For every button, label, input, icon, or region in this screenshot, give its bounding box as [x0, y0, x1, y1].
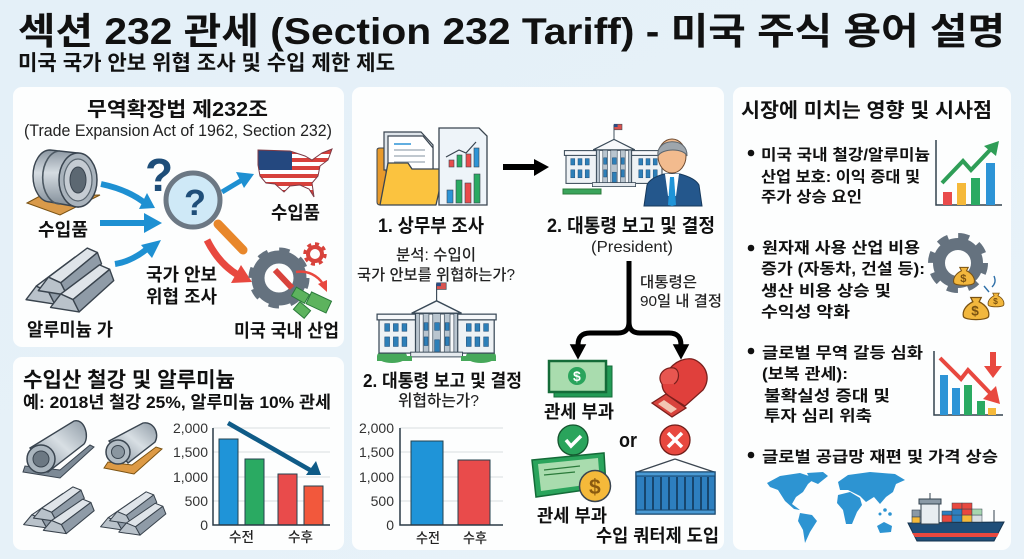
- label: 수입품: 수입품: [38, 220, 88, 240]
- bullet 2 text: 증가 (자동차, 건설 등):: [761, 260, 925, 278]
- bullet 1 text: 미국 국내 철강/알루미늄: [761, 146, 930, 164]
- icon: magnifying glass: [166, 173, 243, 250]
- bullet 2 text: [748, 239, 925, 321]
- label: 국가 안보 위협 조사: 위협 조사: [146, 287, 217, 307]
- label: step 1: 1. 상무부 조사: [378, 215, 484, 237]
- text: step 2 repeat: 위협하는가?: [398, 392, 479, 410]
- panel: imported steel and aluminium: [13, 357, 344, 550]
- icon: container ship: [908, 493, 1004, 541]
- label: 미국 국내 산업: 미국 국내 산업: [234, 321, 339, 341]
- text: 90-day decision: [640, 274, 722, 310]
- label: 국가 안보 위협 조사: 국가 안보: [146, 265, 217, 285]
- icon: cash: $: [573, 368, 581, 384]
- icon: cash: [549, 361, 612, 397]
- panel heading: 수입산 철강 및 알루미늄: [23, 369, 235, 392]
- icon: aluminium ingots: [26, 248, 114, 312]
- bullet 3 text: 투자 심리 위축: [764, 407, 872, 425]
- panel heading: 무역확장법 제232조: [87, 98, 268, 121]
- icon: steel coil on plate: [23, 421, 94, 478]
- label: 국가 안보 위협 조사: [146, 265, 217, 307]
- text: 90-day decision: 대통령은: [640, 274, 697, 291]
- text: step 2 repeat: 2. 대통령 보고 및 결정: [363, 371, 522, 391]
- bar chart: before and after: 수전: [229, 529, 254, 545]
- label: 수입품 (right): 수입품: [271, 203, 320, 223]
- bullet 3 text: 불확실성 증대 및: [764, 387, 890, 405]
- icon: magnifying glass: ?: [184, 182, 206, 223]
- text: analysis question: 분석: 수입이: [396, 246, 476, 264]
- bar chart: before and after: 0: [386, 517, 394, 533]
- icon: US flag map: [256, 148, 334, 200]
- arrow to flag map: [222, 172, 254, 192]
- bullet 2 text: 원자재 사용 산업 비용: [762, 239, 920, 257]
- label: 알루미늄 가: 알루미늄 가: [27, 320, 113, 340]
- text: 90-day decision: 90일 내 결정: [640, 293, 722, 310]
- icon: shipping container: [636, 459, 715, 514]
- panel sub-heading: (Trade Expansion Act of 1962, Section 232): [24, 121, 332, 140]
- title: 섹션 232 관세 (Section 232 Tariff) - 미국 주식 용어 설명: [18, 11, 1005, 52]
- label: tariff: 관세 부과: [544, 402, 614, 422]
- icon: gear with money bags: [931, 236, 1004, 320]
- text: step 2 repeat: [363, 371, 522, 410]
- bullet 3 text: [748, 344, 923, 425]
- panel: market impact: [733, 87, 1011, 550]
- bar chart: before and after: 수후: [463, 530, 487, 546]
- icon: falling chart: [934, 351, 1003, 415]
- bar chart: before and after: 500: [371, 493, 394, 509]
- bar chart: before and after: 1,500: [359, 444, 394, 460]
- icon: x badge: [660, 425, 690, 455]
- icon: gear, wrench and money: [252, 244, 332, 318]
- arrow: red to industry: [207, 240, 252, 283]
- arrow: downward trend: [228, 423, 321, 475]
- bullet 1 text: 산업 보호: 이익 증대 및: [761, 168, 920, 186]
- icon: rising chart: [936, 140, 1002, 205]
- subtitle: 미국 국가 안보 위협 조사 및 수입 제한 제도: [18, 52, 395, 75]
- icon: steel coil on wooden base: [104, 423, 162, 474]
- icon: boxing glove: [652, 359, 707, 417]
- label: or: or: [619, 430, 637, 452]
- arrow: step 1 to step 2: [503, 159, 549, 176]
- icon: ingots left: [24, 487, 94, 534]
- bullet 2 text: 생산 비용 상승 및: [761, 282, 891, 300]
- bar chart: before and after: 1,000: [359, 469, 394, 485]
- bar chart: before and after: [173, 420, 330, 545]
- bullet 3 text: (보복 관세):: [762, 365, 848, 383]
- icon: White House with president: [563, 124, 702, 206]
- bar chart: before and after: 수후: [288, 529, 313, 545]
- icon: folder with documents and charts: [377, 128, 487, 205]
- icon: question mark: ?: [145, 149, 173, 201]
- bullet 4 text: 글로벌 공급망 재편 및 가격 상승: [762, 448, 998, 466]
- icon: White House: [377, 283, 496, 363]
- icon: steel coil: [27, 150, 100, 215]
- text: analysis question: [357, 246, 515, 284]
- arrow: branching decision: [571, 261, 688, 358]
- arrows into magnifier: [100, 184, 162, 264]
- icon: check and coin: $: [589, 476, 601, 499]
- label: President: (President): [591, 239, 673, 256]
- bullet 1 text: [748, 146, 930, 206]
- panel: process flow: [352, 87, 724, 550]
- bar chart: before and after: 2,000: [173, 420, 208, 436]
- bullet 3 text: 글로벌 무역 갈등 심화: [762, 344, 923, 362]
- icon: check and coin: [532, 453, 610, 502]
- label: tariff 2: 관세 부과: [537, 506, 607, 526]
- tariff example: 예: 2018년 철강 25%, 알루미늄 10% 관세: [23, 392, 331, 412]
- bar chart: before and after: 1,000: [173, 469, 208, 485]
- label: step 2: 2. 대통령 보고 및 결정: [547, 215, 715, 237]
- bullet 2 text: 수익성 악화: [761, 303, 850, 321]
- icon: check badge: [558, 425, 588, 455]
- bar chart: before and after: 1,500: [173, 444, 208, 460]
- bar chart: before and after: 500: [185, 493, 208, 509]
- bar chart: before and after: [359, 420, 503, 546]
- text: analysis question: 국가 안보를 위협하는가?: [357, 266, 515, 284]
- bullet 1 text: 주가 상승 요인: [761, 188, 862, 206]
- label: import quota: 수입 쿼터제 도입: [596, 526, 719, 546]
- icon: world map: [767, 472, 905, 543]
- panel: Trade Expansion Act: [13, 87, 344, 347]
- bar chart: before and after: 0: [200, 517, 208, 533]
- icon: ingots right: [101, 492, 166, 535]
- bar chart: before and after: 수전: [416, 530, 440, 546]
- bar chart: before and after: 2,000: [359, 420, 394, 436]
- panel heading: 시장에 미치는 영향 및 시사점: [741, 99, 992, 122]
